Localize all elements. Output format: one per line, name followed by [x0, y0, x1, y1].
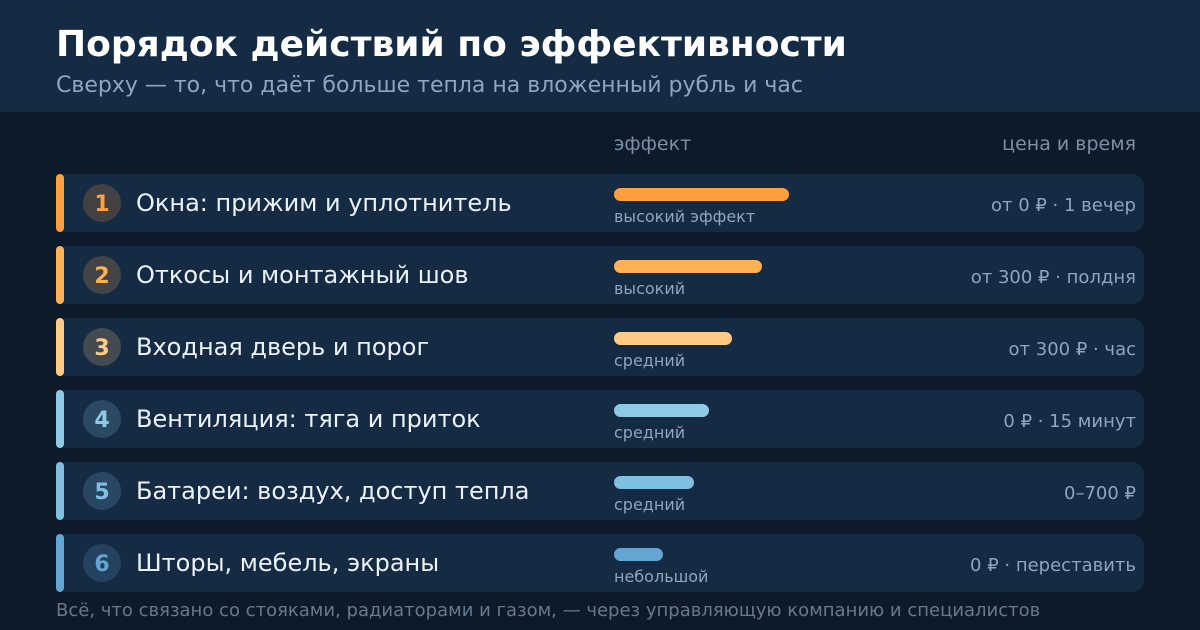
row 2: от 300 ₽ · полдня — [971, 267, 1136, 288]
row 6: 0 ₽ · переставить — [970, 555, 1136, 576]
row 4 — [56, 390, 1144, 448]
row 5 — [56, 462, 1144, 520]
row 6: Шторы, мебель, экраны — [136, 549, 439, 577]
row 3: от 300 ₽ · час — [1009, 339, 1136, 360]
row 3: Входная дверь и порог — [136, 333, 429, 361]
row 3: средний — [614, 351, 685, 370]
row 4: Вентиляция: тяга и приток — [136, 405, 481, 433]
title: Порядок действий по эффективности — [56, 24, 847, 65]
row 2: Откосы и монтажный шов — [136, 261, 468, 289]
row 1 — [56, 174, 1144, 232]
row 4: средний — [614, 423, 685, 442]
row 1: 1 — [94, 192, 110, 217]
row 6 — [56, 534, 1144, 592]
column heading: cost and time: цена и время — [1002, 133, 1136, 155]
row 5: 0–700 ₽ — [1064, 483, 1136, 504]
row 6: 6 — [94, 552, 110, 577]
row 3 — [56, 318, 1144, 376]
row 4: 0 ₽ · 15 минут — [1003, 411, 1136, 432]
row 6: небольшой — [614, 567, 708, 586]
row 2 — [56, 246, 1144, 304]
row 1: высокий эффект — [614, 207, 755, 226]
column heading: effect: эффект — [614, 133, 691, 155]
header band — [0, 0, 1200, 112]
row 5: Батареи: воздух, доступ тепла — [136, 477, 529, 505]
row 3: 3 — [94, 336, 110, 361]
row 4: 4 — [94, 408, 110, 433]
row 2: высокий — [614, 279, 685, 298]
row 2: 2 — [94, 264, 110, 289]
row 5: средний — [614, 495, 685, 514]
row 5: 5 — [94, 480, 110, 505]
row 1: Окна: прижим и уплотнитель — [136, 189, 512, 217]
footnote: Всё, что связано со стояками, радиаторами и газом, — через управляющую компанию и специалистов — [56, 600, 1040, 621]
row 1: от 0 ₽ · 1 вечер — [991, 195, 1136, 216]
subtitle: Сверху — то, что даёт больше тепла на вложенный рубль и час — [56, 73, 803, 98]
